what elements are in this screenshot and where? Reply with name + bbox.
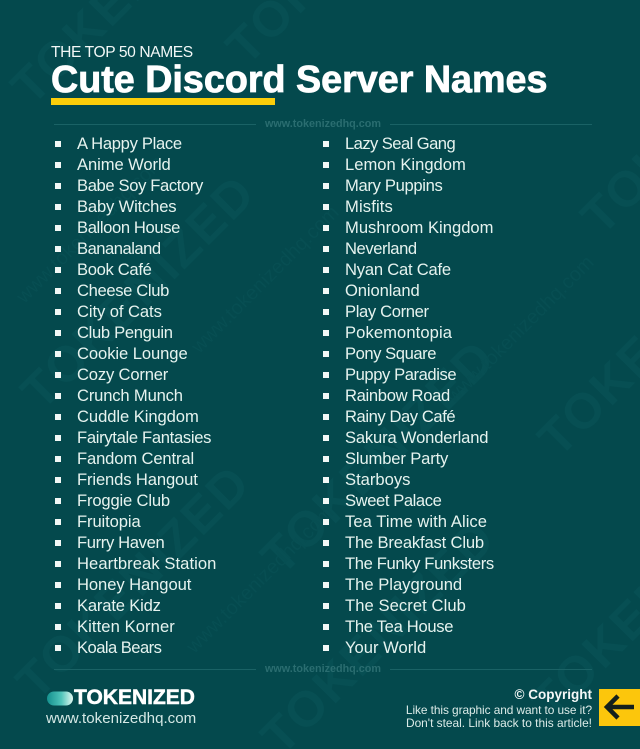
name list: left column: Honey Hangout — [77, 575, 191, 594]
name list: left column: Book Café — [77, 260, 152, 279]
eyebrow heading: THE TOP 50 NAMES — [51, 44, 193, 61]
background watermark pattern: www.tokenizedhq.com — [182, 502, 338, 658]
name list: right column: Tea Time with Alice — [345, 512, 487, 531]
background watermark pattern: www.tokenizedhq.com — [442, 252, 598, 408]
icon: tokenized logo mark — [47, 692, 73, 706]
name list: right column: Sweet Palace — [345, 491, 441, 510]
name list: left column: Cheese Club — [77, 281, 169, 300]
name list: right column: Nyan Cat Cafe — [345, 260, 451, 279]
name list: left column: Balloon House — [77, 218, 180, 237]
background watermark pattern: TOKENIZED — [250, 329, 506, 585]
name list: right column: The Tea House — [345, 617, 453, 636]
name list: right column: Starboys — [345, 470, 410, 489]
name list: left column: Cookie Lounge — [77, 344, 188, 363]
bottom divider with url: www.tokenizedhq.com — [265, 663, 381, 675]
name list: left column: Club Penguin — [77, 323, 173, 342]
name list: left column — [55, 134, 216, 657]
name list: right column: Play Corner — [345, 302, 429, 321]
name list: right column: Puppy Paradise — [345, 365, 456, 384]
name list: left column: Cuddle Kingdom — [77, 407, 199, 426]
name list: left column: Koala Bears — [77, 638, 161, 657]
name list: left column: Friends Hangout — [77, 470, 198, 489]
copyright notice: © Copyright — [515, 687, 592, 702]
name list: right column: Misfits — [345, 197, 393, 216]
background watermark pattern: www.tokenizedhq.com — [187, 202, 343, 358]
name list: right column: The Secret Club — [345, 596, 466, 615]
name list: right column: Pony Square — [345, 344, 436, 363]
name list: right column: Pokemontopia — [345, 323, 452, 342]
name list: right column: Mushroom Kingdom — [345, 218, 494, 237]
title: Cute Discord Server Names — [51, 58, 547, 100]
background watermark pattern: TOKENIZED — [5, 454, 261, 710]
background watermark pattern: TOKENIZED — [10, 164, 266, 420]
name list: right column: Rainbow Road — [345, 386, 450, 405]
background watermark pattern: www.tokenizedhq.com — [12, 152, 168, 308]
name list: left column: Bananaland — [77, 239, 161, 258]
logo wordmark: TOKENIZED — [74, 686, 195, 709]
name list: right column: Onionland — [345, 281, 420, 300]
name list: right column: Lemon Kingdom — [345, 155, 466, 174]
website url: www.tokenizedhq.com — [46, 710, 196, 727]
name list: left column: Baby Witches — [77, 197, 176, 216]
name list: right column: The Breakfast Club — [345, 533, 484, 552]
icon: yellow back arrow — [599, 689, 640, 726]
name list: left column: Karate Kidz — [77, 596, 161, 615]
name list: left column: Kitten Korner — [77, 617, 175, 636]
name list: left column: Fruitopia — [77, 512, 141, 531]
name list: left column: Fandom Central — [77, 449, 194, 468]
name list: right column: Your World — [345, 638, 426, 657]
name list: right column — [323, 134, 494, 657]
name list: left column: Anime World — [77, 155, 171, 174]
name list: right column: Mary Puppins — [345, 176, 442, 195]
name list: left column: Crunch Munch — [77, 386, 183, 405]
name list: right column: Rainy Day Café — [345, 407, 455, 426]
copyright notice: Like this graphic and want to use it? — [406, 703, 592, 717]
name list: left column: Babe Soy Factory — [77, 176, 203, 195]
name list: right column: Sakura Wonderland — [345, 428, 488, 447]
name list: right column: The Funky Funksters — [345, 554, 494, 573]
name list: left column: Fairytale Fantasies — [77, 428, 211, 447]
name list: right column: Neverland — [345, 239, 417, 258]
name list: left column: City of Cats — [77, 302, 162, 321]
name list: left column: Froggie Club — [77, 491, 170, 510]
copyright notice — [406, 687, 592, 730]
name list: left column: Cozy Corner — [77, 365, 168, 384]
title underline — [51, 98, 275, 104]
copyright notice: Don't steal. Link back to this article! — [406, 716, 592, 730]
name list: right column: Lazy Seal Gang — [345, 134, 455, 153]
name list: left column: Heartbreak Station — [77, 554, 216, 573]
name list: right column: The Playground — [345, 575, 462, 594]
name list: left column: Furry Haven — [77, 533, 164, 552]
top divider with url: www.tokenizedhq.com — [265, 118, 381, 130]
name list: left column: A Happy Place — [77, 134, 182, 153]
name list: right column: Slumber Party — [345, 449, 448, 468]
